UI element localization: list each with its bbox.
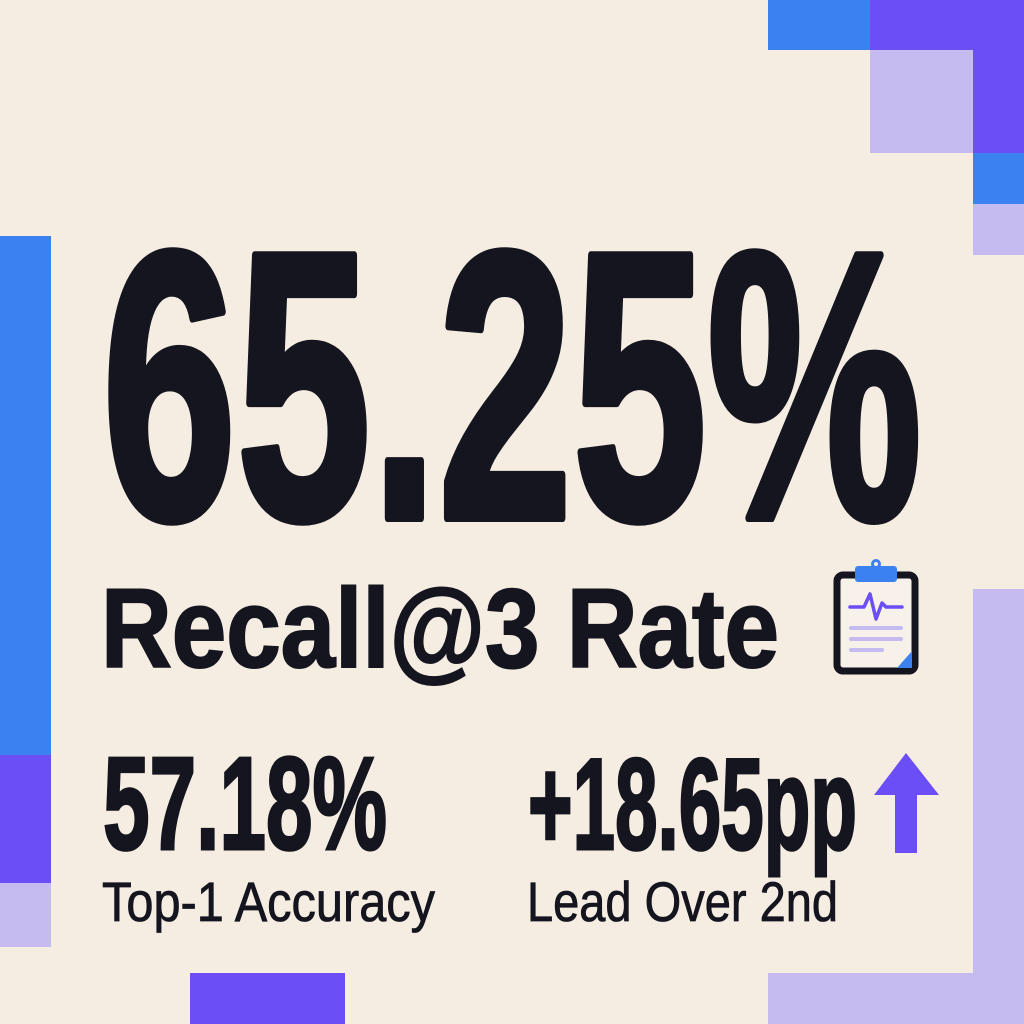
stat: lead over 2nd: Lead Over 2nd	[527, 870, 838, 933]
decorative blocks: top right	[768, 0, 1024, 255]
stat: top-1 accuracy: 57.18%	[103, 730, 387, 877]
decorative blocks: left bar	[0, 236, 51, 947]
stat: top-1 accuracy	[102, 730, 435, 933]
decorative blocks: bottom	[190, 589, 1024, 1024]
stat: lead over 2nd	[527, 731, 857, 933]
icon: up arrow	[874, 753, 939, 853]
subtitle: Recall@3 Rate: Recall@3 Rate	[101, 566, 779, 691]
icon: clipboard	[837, 559, 915, 671]
stat: top-1 accuracy: Top-1 Accuracy	[102, 870, 435, 933]
